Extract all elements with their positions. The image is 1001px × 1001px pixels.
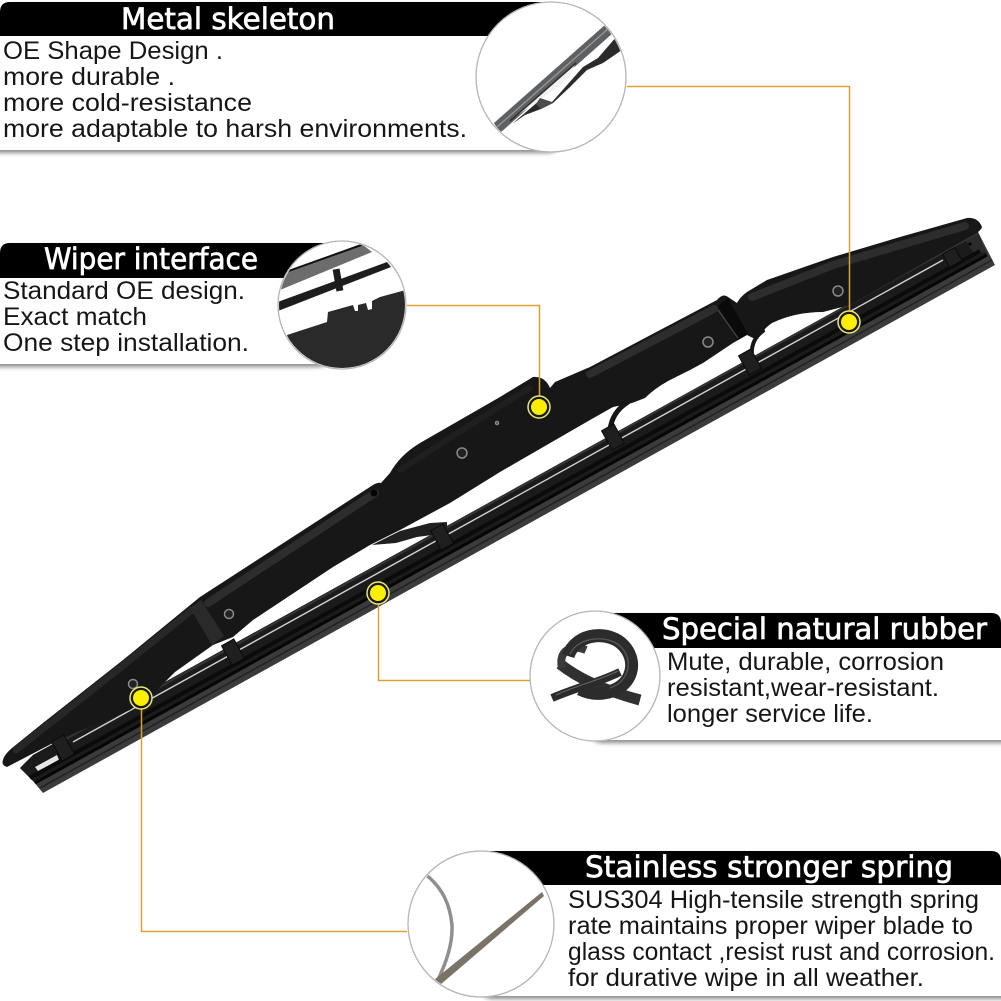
arm rivets <box>128 286 843 688</box>
rail groove lines <box>30 233 992 788</box>
body text: more adaptable to harsh environments. <box>3 115 467 143</box>
heading bar <box>590 613 1001 648</box>
panel: special natural rubber <box>530 611 1001 741</box>
body text: rate maintains proper wiper blade to <box>568 912 973 940</box>
blade clips <box>52 247 962 761</box>
body text: OE Shape Design . <box>3 37 223 65</box>
heading bar <box>0 243 345 278</box>
body text: Standard OE design. <box>3 277 245 305</box>
spring under arm <box>372 522 447 545</box>
arm segment seams <box>190 298 748 645</box>
body text: longer service life. <box>667 700 873 728</box>
body text: One step installation. <box>3 329 249 357</box>
body text <box>568 886 995 992</box>
rubber blade strip <box>20 232 995 793</box>
body text: Exact match <box>3 303 147 331</box>
wiper arm <box>2 218 982 767</box>
body text: more cold-resistance <box>3 89 252 117</box>
body text <box>667 648 944 728</box>
springs <box>610 331 763 430</box>
body text: glass contact ,resist rust and corrosion. <box>568 938 995 966</box>
heading bar <box>0 2 560 36</box>
body text <box>3 37 467 143</box>
panel: stainless stronger spring <box>408 850 1001 997</box>
body text: resistant,wear-resistant. <box>667 674 939 702</box>
body text: SUS304 High-tensile strength spring <box>568 886 979 914</box>
icon: blade close-up <box>476 2 626 152</box>
heading: Special natural rubber <box>662 612 987 646</box>
black rail <box>20 232 987 783</box>
icon: interface close-up <box>272 241 410 375</box>
panel: wiper interface <box>0 241 410 375</box>
body text: more durable . <box>3 63 175 91</box>
heading: Metal skeleton <box>121 2 335 36</box>
body text: for durative wipe in all weather. <box>568 964 924 992</box>
heading: Stainless stronger spring <box>585 850 953 884</box>
panel: metal skeleton <box>0 2 626 152</box>
heading bar <box>480 851 1001 885</box>
body text <box>3 277 249 357</box>
arm top highlight <box>16 226 965 750</box>
icon: rubber strip knot <box>530 611 660 741</box>
rail end details <box>965 232 986 255</box>
icon: spring close-up <box>408 851 554 997</box>
heading: Wiper interface <box>44 242 258 276</box>
body text: Mute, durable, corrosion <box>667 648 944 676</box>
marker dots <box>130 311 860 709</box>
connector lines <box>142 86 850 932</box>
wiper blade <box>2 218 995 793</box>
